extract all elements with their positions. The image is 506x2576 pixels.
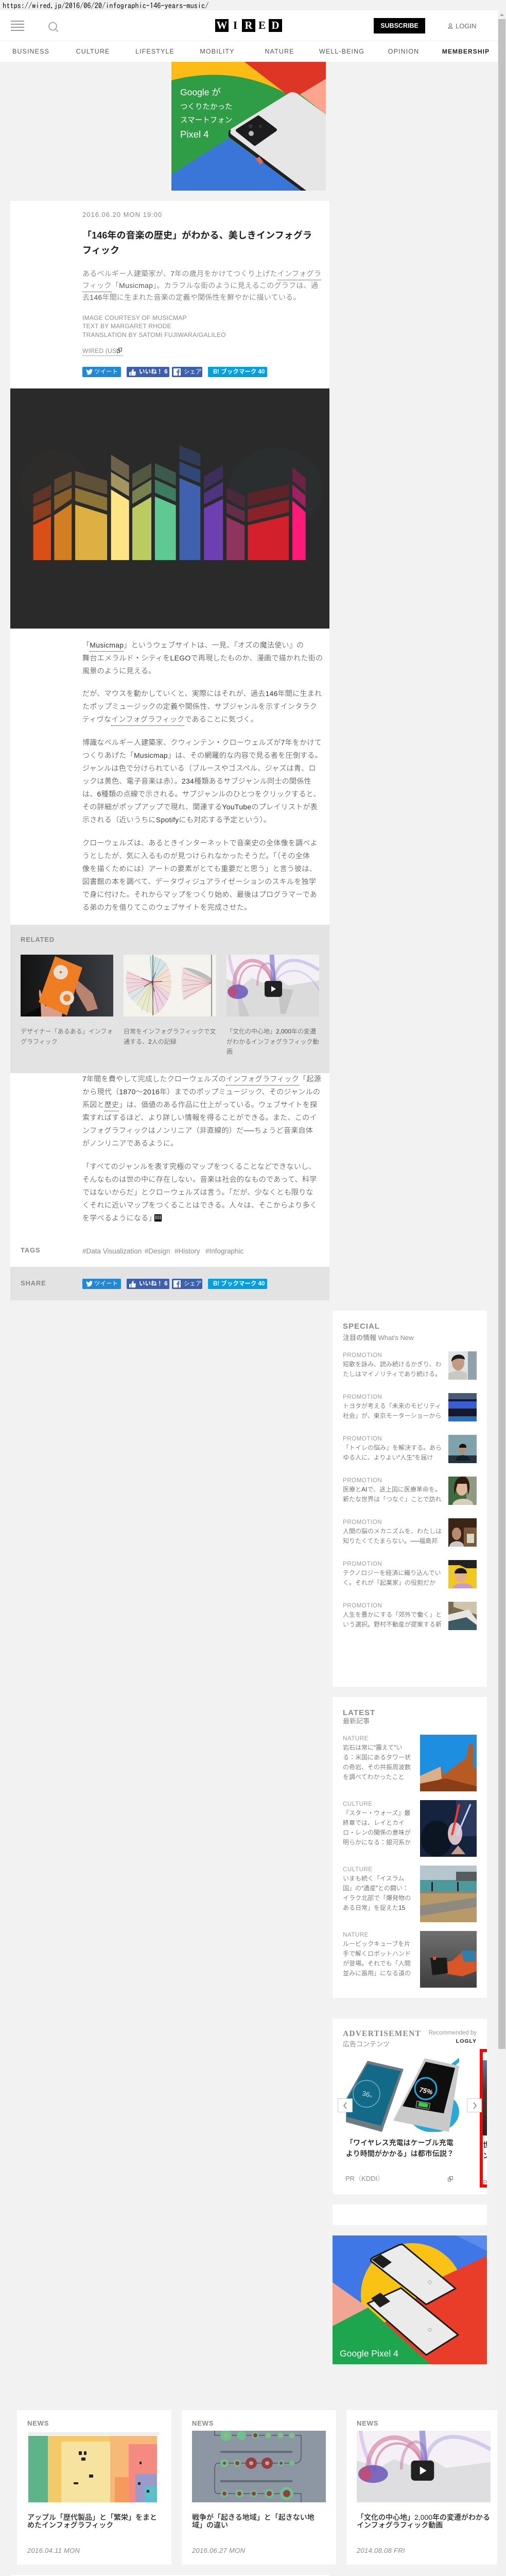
news title: インフォグラフィック動画	[357, 2520, 443, 2529]
nav: culture: CULTURE	[76, 48, 110, 55]
article 1 body paragraph 3: その詳細がポップアップで現れ、関連するYouTubeのプレイリストが表	[82, 803, 318, 811]
latest item 3 title: 国」の“遺産”との闘い：	[343, 1885, 409, 1892]
article 1 date: 2016.06.20 MON 19:00	[82, 211, 162, 218]
facebook share button	[172, 1279, 202, 1289]
tags: #History	[175, 1247, 200, 1255]
tweet button: ツイート	[94, 369, 118, 375]
article 1 credits: TEXT BY MARGARET RHODE	[82, 323, 171, 330]
special item 7 title: いう選択。野村不動産が提案する新	[343, 1621, 442, 1628]
special item 4 title: 医療とAIで、途上国に医療革命を。	[343, 1486, 441, 1493]
hatena bookmark button	[208, 367, 267, 377]
article 1 body paragraph 4: 像を描くためには）アートの要素がとても重要だと思う」と言う彼は、	[82, 865, 317, 873]
article 1 body paragraph 6	[82, 1162, 317, 1222]
next arrow	[467, 2098, 482, 2112]
special item 5 title	[343, 1528, 442, 1545]
news title: 「文化の中心地」2,000年の変遷がわかる	[357, 2513, 490, 2521]
subscribe button	[374, 18, 425, 33]
slide title: より時間がかかる」は都市伝説？	[346, 2149, 454, 2158]
article 1 body paragraph 5: から現代（1870〜2016年）までのポップミュージック、そのジャンルの	[82, 1087, 320, 1095]
article 1 body paragraph 1: 舞台エメラルド・シティをLEGOで再現したものか、漫画で描かれた街の	[82, 653, 323, 662]
latest item 2 title: ロ・レンの関係の意味が	[343, 1829, 411, 1836]
article 1 body paragraph 6: 「すべてのジャンルを表す究極のマップをつくることなどできないし、	[82, 1162, 316, 1171]
share buttons top	[82, 367, 267, 377]
ad copy: Google Pixel 4	[340, 2348, 398, 2359]
special item 5 thumb	[448, 1518, 477, 1547]
article 1 credits	[82, 314, 226, 338]
hatena bookmark button: B! ブックマーク 40	[213, 1281, 265, 1287]
special item 2 category: PROMOTION	[343, 1394, 382, 1400]
special item 1 category: PROMOTION	[343, 1352, 382, 1359]
panel: special	[333, 1311, 487, 1687]
wired logo	[215, 19, 282, 32]
menu icon	[11, 21, 24, 31]
hatena bookmark button	[208, 1279, 267, 1289]
end mark	[154, 1214, 162, 1222]
article 1 body paragraph 3: ックは黄色、電子音楽は赤）。234種類あるサブジャンル同士の関係性	[82, 777, 311, 785]
article 1 title	[82, 230, 312, 256]
news date: 2014.08.08 FRI	[357, 2547, 405, 2554]
latest item 3 title: いまも続く「イスラム	[343, 1874, 404, 1882]
news title: アップル「歴代製品」と「繁栄」をまと	[27, 2513, 157, 2521]
latest item 1 title: を調べてわかったこと	[343, 1773, 405, 1781]
ad copy: つくりたかった	[180, 103, 233, 111]
related caption 3: 画	[226, 1048, 233, 1055]
special item 1 title: 短歌を詠み、読み続けるかぎり、わ	[343, 1361, 442, 1368]
tweet button: ツイート	[94, 1281, 118, 1287]
slide image: wireless charging phones: 36%	[361, 2089, 374, 2099]
article 1 body paragraph 3: 示される（近いうちにSpotifyにも対応する予定という）。	[82, 816, 271, 824]
special item 4 category: PROMOTION	[343, 1478, 382, 1484]
article 1 body paragraph 5: 索すればするほど、より詳しい情報を得ることができる。また、このイ	[82, 1113, 317, 1121]
special item 6 title	[343, 1569, 441, 1586]
article 1 lede	[82, 269, 321, 301]
ad copy: Pixel 4	[180, 129, 209, 140]
wired logo: D	[271, 19, 280, 31]
article 1 body paragraph 4: うとしたが、気に入るものが見つけられなかったそうだ。「（その全体	[82, 851, 310, 859]
nav: lifestyle: LIFESTYLE	[135, 48, 175, 55]
ad: google pixel sidebar	[333, 2235, 487, 2364]
special item 4 thumb	[448, 1477, 477, 1505]
facebook share button: シェア	[184, 1281, 202, 1287]
article 1 body paragraph 2: ティヴなインフォグラフィックであることに気づく。	[82, 715, 258, 723]
article 1 body paragraph 3: は、6種類の点線で示される。サブジャンルのひとつをクリックすると、	[82, 790, 321, 798]
special item 3 title	[343, 1444, 442, 1461]
article 1 lede: あるベルギー人建築家が、7年の歳月をかけてつくり上げたインフォグラ	[82, 269, 321, 277]
scrollbar	[498, 10, 506, 2576]
ad copy: スマートフォン	[180, 116, 232, 125]
wired logo: W	[216, 19, 228, 31]
article 1 source link: WIRED (US)	[82, 347, 118, 354]
news label: NEWS	[27, 2419, 49, 2427]
ad copy	[180, 87, 233, 140]
special item 3 title: 「トイレの悩み」を解決する。あら	[343, 1444, 442, 1451]
article 1 body paragraph 3: ジャンルは色で分けられている（ブルースやゴスペル、ジャズは青、ロ	[82, 764, 316, 772]
news label: NEWS	[357, 2419, 378, 2427]
tags: #Data Visualization	[82, 1247, 142, 1255]
wired logo: R	[245, 19, 253, 31]
facebook share button: シェア	[184, 369, 202, 375]
news date: 2016.04.11 MON	[27, 2547, 80, 2554]
news title	[357, 2514, 490, 2529]
page url: https://wired.jp/2016/06/20/infographic-146-years-music/	[3, 2, 208, 9]
news date: 2016.06.27 MON	[192, 2547, 245, 2554]
latest item 1 title	[343, 1743, 411, 1781]
news card 2	[182, 2410, 336, 2565]
special item 2 title	[343, 1402, 442, 1419]
article card 1	[10, 201, 329, 1267]
special item 3 thumb	[448, 1435, 477, 1463]
latest item 4 title: 並みに器用」になる道の	[343, 1969, 411, 1976]
next slide text	[483, 2140, 490, 2161]
special item 5 title: 人間の脳のメカニズムを、わたしは	[343, 1528, 442, 1535]
slide image: wireless charging phones	[346, 2058, 459, 2132]
latest item 4 title: 手で解くロボットハンド	[343, 1950, 411, 1957]
article 1 body paragraph 4: 図書館の本を調べて、データヴィジュアライゼーションのスキルを独学	[82, 877, 316, 885]
scroll thumb	[498, 19, 505, 2049]
wired logo: I	[233, 19, 237, 31]
empty ad slot	[333, 2205, 487, 2225]
latest item 4 title	[343, 1939, 411, 1978]
tweet button	[82, 367, 121, 377]
latest item 4 title: ルービックキューブを片	[343, 1940, 410, 1947]
tweet button	[82, 1279, 121, 1289]
special item 2 title: 社会」が、東京モーターショーから	[343, 1412, 442, 1419]
special item 4 title	[343, 1486, 442, 1503]
related thumb 2	[124, 955, 216, 1016]
article 1 body paragraph 6: ではないからだ」とクローウェルズは言う。「だが、少なくとも限りな	[82, 1188, 313, 1196]
news image: war chart	[192, 2431, 326, 2502]
share label: SHARE	[21, 1279, 46, 1287]
latest item 3 category: CULTURE	[343, 1867, 373, 1873]
related caption 2: 通する、2人の記録	[124, 1038, 177, 1045]
article 1 body paragraph 5: 系図と歴史」は、価値のある作品に仕上がっている。ウェブサイトを探	[82, 1100, 317, 1109]
special item 1 title: たしはマイノリティであり続ける。	[343, 1370, 441, 1378]
article 1 title: フィック	[82, 245, 119, 256]
article 1 body paragraph 1	[82, 641, 323, 675]
special item 6 thumb	[448, 1560, 477, 1588]
article 1 credits: IMAGE COURTESY OF MUSICMAP	[82, 314, 187, 321]
article 1 body paragraph 2: たポップミュージックの定義や関係性、サブジャンルを示すインタラク	[82, 702, 317, 710]
article 1 body paragraph 3: つくりあげた「Musicmap」は、その網羅的な内容で見る者を圧倒する。	[82, 751, 322, 759]
article 1 body paragraph 2: だが、マウスを動かしていくと、実際にはそれが、過去146年間に生まれ	[82, 689, 322, 698]
panel: latest	[333, 1697, 487, 1998]
like button: いいね！ 6	[139, 369, 168, 375]
article 1 body paragraph 3: 博識なベルギー人建築家、クウィンテン・クローウェルズが7年をかけて	[82, 738, 322, 747]
special item 4 title: 新たな世界は「つなぐ」ことで訪れ	[343, 1496, 442, 1503]
nav: mobility: MOBILITY	[200, 48, 235, 55]
special item 2 title: トヨタが考える「未来のモビリティ	[343, 1402, 441, 1410]
article 1 body paragraph 5: ンフォグラフィックはノンリニア（非直線的）だ──ちょうど音楽自体	[82, 1126, 313, 1134]
related thumb 1	[21, 955, 113, 1016]
nav: opinion: OPINION	[388, 48, 419, 55]
special item 7 title: 人生を豊かにする「郊外で働く」と	[343, 1611, 442, 1618]
next slide image	[483, 2060, 487, 2136]
hatena bookmark button: B! ブックマーク 40	[213, 369, 265, 375]
external link icon	[448, 2176, 453, 2181]
latest item 2 title: 明らかになる：銀河系か	[343, 1838, 411, 1845]
article 1 body paragraph 5	[82, 1075, 321, 1147]
article 1 body paragraph 4: で身に付けた。それからマップをつくり始め、最後はプログラマーであ	[82, 890, 317, 899]
tags: #Infographic	[205, 1247, 243, 1255]
article 1 body paragraph 6: を学べるようになる」	[82, 1214, 156, 1222]
latest item 1 title: る：米国にあるタワー状	[343, 1754, 411, 1761]
hero image: musicmap	[10, 388, 329, 629]
special item 6 category: PROMOTION	[343, 1561, 382, 1567]
recommended by: Recommended by	[429, 2030, 477, 2036]
special item 7 category: PROMOTION	[343, 1603, 382, 1609]
special item 2 thumb	[448, 1393, 477, 1421]
latest item 4 category: NATURE	[343, 1932, 369, 1938]
latest item 1 title: 岩石は常に“震えて”い	[343, 1743, 402, 1751]
article 1 lede: 去146年間に生まれた音楽の定義や関係性を鮮やかに描いている。	[82, 293, 301, 301]
panel: share strip	[10, 1267, 329, 1300]
ad: google pixel top	[171, 62, 326, 191]
slide image: wireless charging phones: 75%	[418, 2086, 433, 2096]
related caption 3: がわかるインフォグラフィック動	[226, 1038, 319, 1045]
article 1 body paragraph 4	[82, 839, 318, 911]
news title	[27, 2514, 157, 2529]
slide title: 「ワイヤレス充電はケーブル充電	[346, 2139, 453, 2147]
news title: 戦争が「起きる地域」と「起きない地	[192, 2513, 315, 2521]
article 1 body paragraph 6: くそれに近いマップをつくることはできる。人々は、そこからより多く	[82, 1200, 317, 1209]
article 1 body paragraph 2	[82, 689, 322, 726]
related heading: RELATED	[21, 936, 55, 943]
special item 3 category: PROMOTION	[343, 1436, 382, 1442]
article 1 body paragraph 4: クローウェルズは、あるときインターネットで音楽史の全体像を調べよ	[82, 839, 318, 847]
nav: membership: MEMBERSHIP	[442, 48, 490, 55]
panel: advertisement	[333, 2019, 487, 2194]
article 1 source link	[82, 347, 123, 356]
latest item 2 category: CULTURE	[343, 1801, 373, 1807]
nav: business: BUSINESS	[12, 48, 49, 55]
related caption 1	[21, 1028, 113, 1045]
slide title	[346, 2138, 454, 2159]
article 1 body paragraph 5: がノンリニアであるように。	[82, 1139, 178, 1147]
news card 3	[346, 2410, 497, 2565]
special subheading: 注目の情報 What's New	[343, 1334, 414, 1342]
login link: LOGIN	[456, 22, 476, 30]
news title	[192, 2514, 315, 2529]
news image: apple chart	[27, 2431, 161, 2502]
latest item 2 title: 『スター・ウォーズ』最	[343, 1809, 410, 1817]
like button	[127, 367, 169, 377]
facebook share button	[172, 367, 202, 377]
special item 6 title: く。それが「起業家」の役割だか	[343, 1579, 435, 1586]
article 1 lede: フィック「Musicmap」。カラフルな街のように見えるこのグラフは、過	[82, 281, 318, 290]
latest item 3 title: イラク北部で「爆発物の	[343, 1894, 411, 1901]
prev arrow	[338, 2098, 353, 2112]
tags label: TAGS	[21, 1246, 40, 1254]
latest item 1 image: canyon	[420, 1735, 477, 1791]
article 1 body paragraph 3	[82, 738, 322, 824]
latest item 3 title: ある日常」を捉えた15	[343, 1904, 405, 1911]
article 1 body paragraph 6: そんなものは世の中に存在しない。音楽は社会的なものであって、科学	[82, 1175, 317, 1183]
site header	[0, 10, 498, 62]
latest item 2 title: 終章では、レイとカイ	[343, 1819, 405, 1826]
slide source: PR（KDDI）	[345, 2175, 384, 2182]
special item 7 title	[343, 1611, 442, 1628]
tags	[82, 1247, 243, 1255]
article 1 body paragraph 1: 「Musicmap」というウェブサイトは、一見、『オズの魔法使い』の	[82, 641, 304, 649]
latest heading: LATEST	[343, 1708, 375, 1717]
share buttons bottom	[82, 1279, 267, 1289]
special item 6 title: テクノロジーを経済に織り込んでい	[343, 1569, 441, 1577]
latest item 1 category: NATURE	[343, 1736, 369, 1742]
like button: いいね！ 6	[139, 1281, 168, 1287]
logly: LOGLY	[456, 2038, 477, 2044]
article 1 credits: TRANSLATION BY SATOMI FUJIWARA/GALILEO	[82, 331, 226, 338]
news title: 域」の違い	[192, 2520, 228, 2529]
special item 1 thumb	[448, 1351, 477, 1380]
latest item 3 image: bridge	[420, 1866, 477, 1922]
search icon	[48, 22, 59, 32]
play button	[265, 981, 282, 997]
related caption 3: 「文化の中心地」2,000年の変遷	[226, 1028, 316, 1035]
like button	[127, 1279, 169, 1289]
scroll arrow	[500, 13, 504, 16]
related caption 1: グラフィック	[21, 1038, 58, 1045]
article 1 body paragraph 5: 7年間を費やして完成したクローウェルズのインフォグラフィック「起源	[82, 1075, 321, 1083]
latest item 1 title: の奇岩、その共振周波数	[343, 1763, 411, 1770]
ad subheading: 広告コンテンツ	[343, 2040, 390, 2048]
news title: めたインフォグラフィック	[27, 2520, 113, 2529]
special item 5 title: 知りたくてたまらない。──福島邦	[343, 1537, 438, 1545]
nav: well-being: WELL-BEING	[319, 48, 364, 55]
special item 3 title: ゆる人に、よりよい“人生”を届け	[343, 1454, 433, 1461]
related caption 2	[124, 1028, 216, 1045]
related caption 2: 日常をインフォグラフィックで文	[124, 1028, 216, 1035]
ad heading: ADVERTISEMENT	[343, 2029, 421, 2038]
latest item 2 title	[343, 1808, 411, 1848]
latest item 4 image: robot hand	[420, 1931, 477, 1988]
next slide with highlight border	[480, 2049, 500, 2188]
news image: culture map	[357, 2431, 491, 2502]
news card 1	[17, 2410, 171, 2565]
latest item 4 title: が登場。それでも「人間	[343, 1960, 411, 1967]
ad copy: Google が	[180, 87, 221, 97]
tags: #Design	[145, 1247, 170, 1255]
wired logo: E	[258, 19, 266, 31]
special item 5 category: PROMOTION	[343, 1519, 382, 1526]
article 1 body paragraph 4: る弟の力を借りてこのウェブサイトを完成させた。	[82, 903, 251, 911]
article card 2	[10, 2575, 329, 2576]
related thumb 3	[226, 955, 319, 1016]
panel: related	[10, 925, 329, 1073]
related caption 1: デザイナー「あるある」インフォ	[21, 1028, 113, 1035]
related caption 3	[226, 1028, 319, 1055]
news label: NEWS	[192, 2419, 214, 2427]
special item 1 title	[343, 1361, 442, 1378]
special item 7 thumb	[448, 1602, 477, 1630]
play button	[411, 2461, 434, 2481]
nav: nature: NATURE	[265, 48, 294, 55]
latest item 2 image: lightsabers	[420, 1800, 477, 1857]
subscribe button: SUBSCRIBE	[380, 22, 418, 29]
special heading: SPECIAL	[343, 1322, 380, 1331]
article 1 body paragraph 1: 風景のように見える。	[82, 667, 155, 675]
latest item 3 title	[343, 1873, 411, 1912]
article 1 title: 「146年の音楽の歴史」がわかる、美しきインフォグラ	[82, 230, 312, 241]
latest subheading: 最新記事	[343, 1717, 370, 1725]
